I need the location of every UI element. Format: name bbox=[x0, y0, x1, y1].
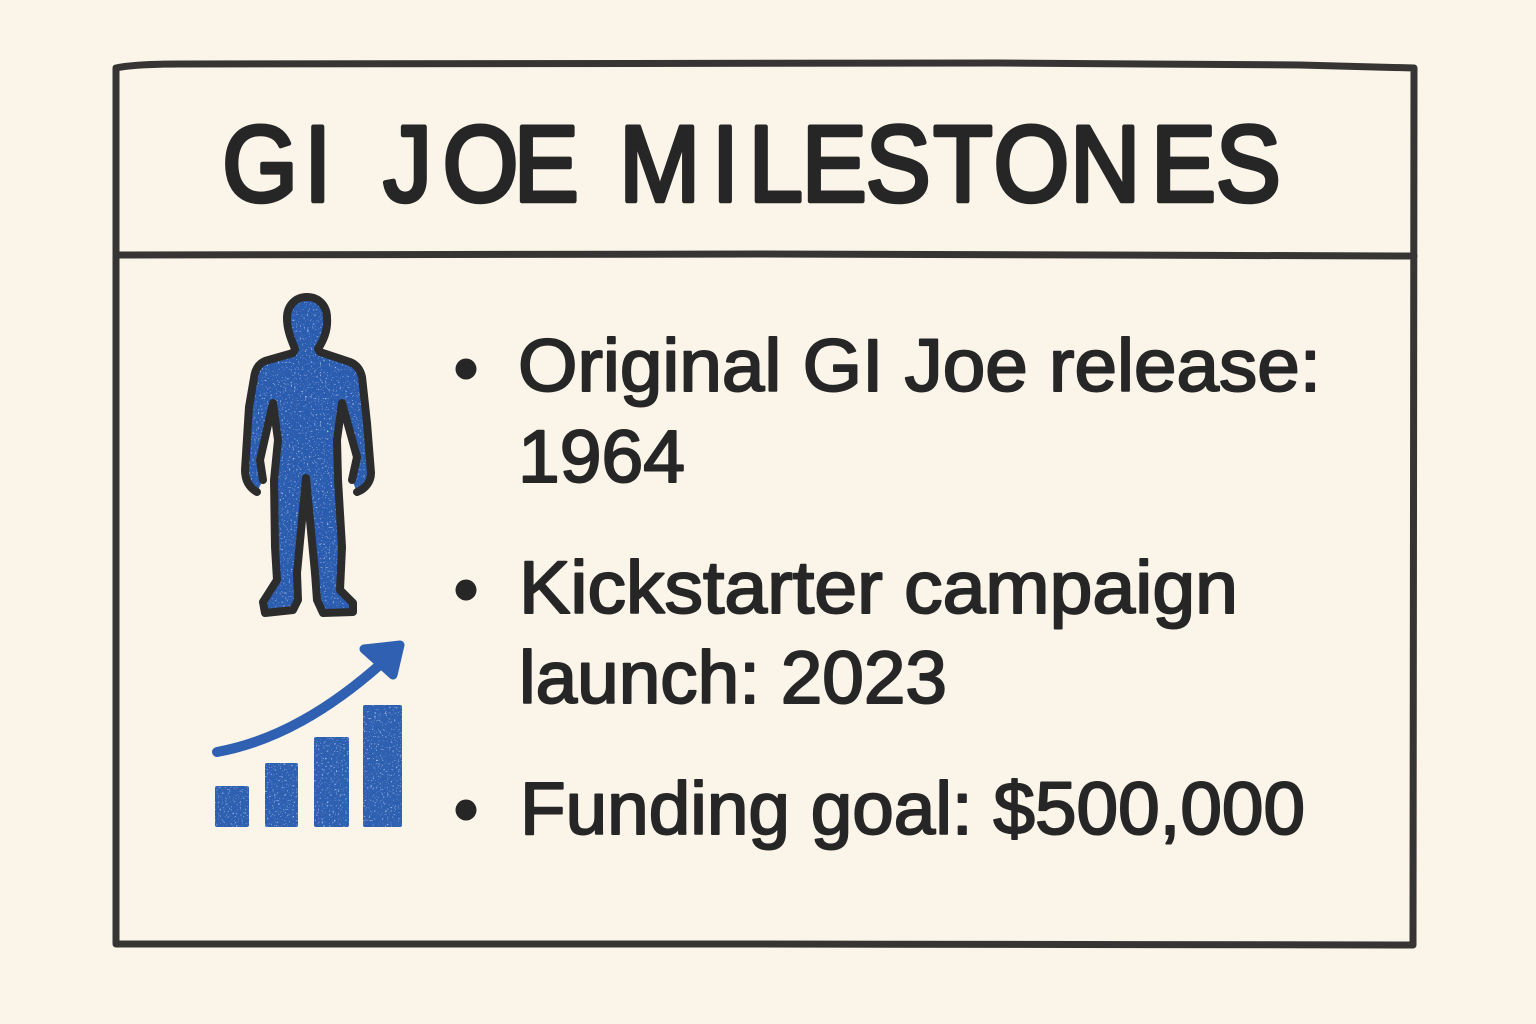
bullet: kickstarter launch: launch: 2023 bbox=[519, 636, 947, 719]
bullet: kickstarter launch bbox=[456, 546, 1238, 719]
title: GI JOE MILESTONES bbox=[222, 103, 1281, 224]
icon: person figure bbox=[245, 297, 371, 613]
bullet: original release: Original GI Joe release: bbox=[518, 324, 1321, 407]
icon: growth bar chart with arrow bbox=[215, 645, 402, 827]
bullet: original release: 1964 bbox=[518, 415, 685, 498]
panel: milestones frame bbox=[116, 63, 1414, 945]
bars bbox=[215, 705, 402, 827]
bullet list bbox=[456, 324, 1321, 850]
bullet: kickstarter launch: Kickstarter campaign bbox=[519, 546, 1238, 629]
arrow bbox=[217, 645, 400, 752]
bullet: funding goal: Funding goal: $500,000 bbox=[520, 767, 1305, 850]
bullet: original release bbox=[456, 324, 1321, 498]
